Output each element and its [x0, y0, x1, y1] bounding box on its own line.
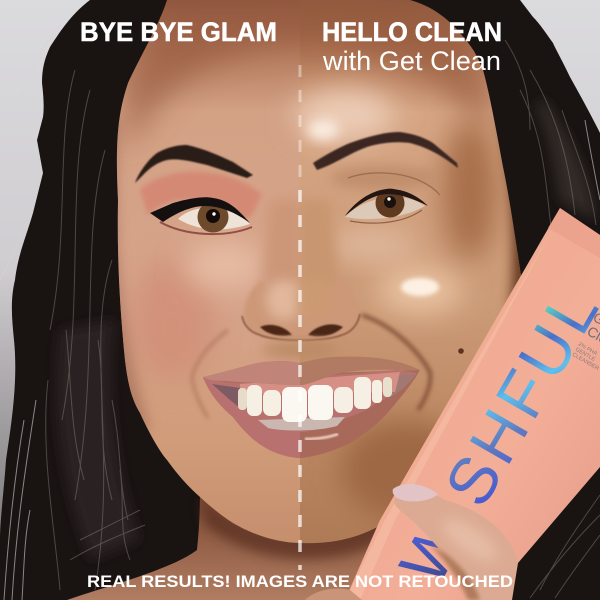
clean right half skin — [300, 0, 521, 544]
nose bridge right — [303, 201, 339, 278]
hairline shadow — [120, 0, 495, 150]
nose — [242, 280, 360, 342]
left heading: BYE BYE GLAM — [80, 17, 277, 47]
upper lip — [203, 357, 420, 385]
smile fold right — [362, 315, 430, 410]
mole — [458, 348, 464, 354]
fingernail — [393, 484, 438, 501]
brow bone shine — [307, 120, 339, 140]
nostril left — [260, 325, 292, 336]
face — [116, 0, 521, 544]
hair sheen left — [56, 320, 140, 560]
left eye — [150, 197, 252, 234]
upper teeth — [238, 377, 392, 422]
pink eyeshadow left — [140, 172, 262, 219]
lower lip left — [203, 377, 300, 458]
forehead shine — [295, 89, 395, 141]
philtrum shade — [262, 341, 338, 359]
tube crimp shade — [548, 208, 600, 258]
product description: CLEANSER — [571, 352, 600, 372]
knuckle shade — [430, 545, 480, 600]
glam left half skin — [116, 0, 300, 543]
back mouth shadow right — [388, 374, 415, 398]
hand holding tube — [305, 484, 518, 600]
lower right jaw tone — [335, 410, 438, 520]
dashed divider top faint — [298, 65, 302, 190]
right subheading: with Get Clean — [322, 46, 501, 76]
right temple tone — [442, 120, 498, 260]
product description: GENTLE — [574, 347, 596, 363]
neck and shoulder — [67, 470, 440, 600]
neck shadow under chin — [200, 480, 420, 559]
lower lip right — [203, 370, 420, 458]
product tube — [345, 208, 600, 600]
right cheek shine — [401, 278, 439, 296]
left eyebrow — [135, 145, 253, 183]
disclaimer: REAL RESULTS! IMAGES ARE NOT RETOUCHED — [87, 572, 513, 591]
smile fold left — [192, 330, 228, 418]
finger highlight — [437, 512, 503, 568]
light under left eye — [185, 241, 265, 289]
lower teeth — [258, 417, 345, 430]
nose tip left — [266, 280, 302, 320]
nostril right — [308, 324, 343, 336]
blush left cheek — [130, 260, 214, 380]
upper lip left glam — [203, 361, 300, 385]
mouth — [203, 357, 420, 458]
product description: 2% PHA — [577, 342, 598, 357]
right eyebrow — [313, 132, 458, 170]
left face edge shadow — [117, 126, 152, 430]
dashed divider — [298, 190, 302, 570]
nose tip right — [298, 280, 334, 320]
mouth interior — [210, 370, 417, 432]
back mouth shadow left — [212, 384, 240, 408]
tube left edge shade — [345, 225, 555, 600]
right eye socket — [330, 166, 440, 190]
gum — [240, 372, 400, 394]
right under eye light — [326, 229, 418, 261]
right face edge shadow — [494, 122, 521, 306]
right eye — [345, 173, 440, 223]
hair sheen right — [535, 100, 596, 220]
nose bridge left — [262, 200, 300, 290]
right cheek shine broad — [378, 266, 462, 314]
lower lip shine — [305, 434, 338, 439]
right heading: HELLO CLEAN — [322, 17, 502, 47]
palm at bottom — [305, 588, 362, 600]
